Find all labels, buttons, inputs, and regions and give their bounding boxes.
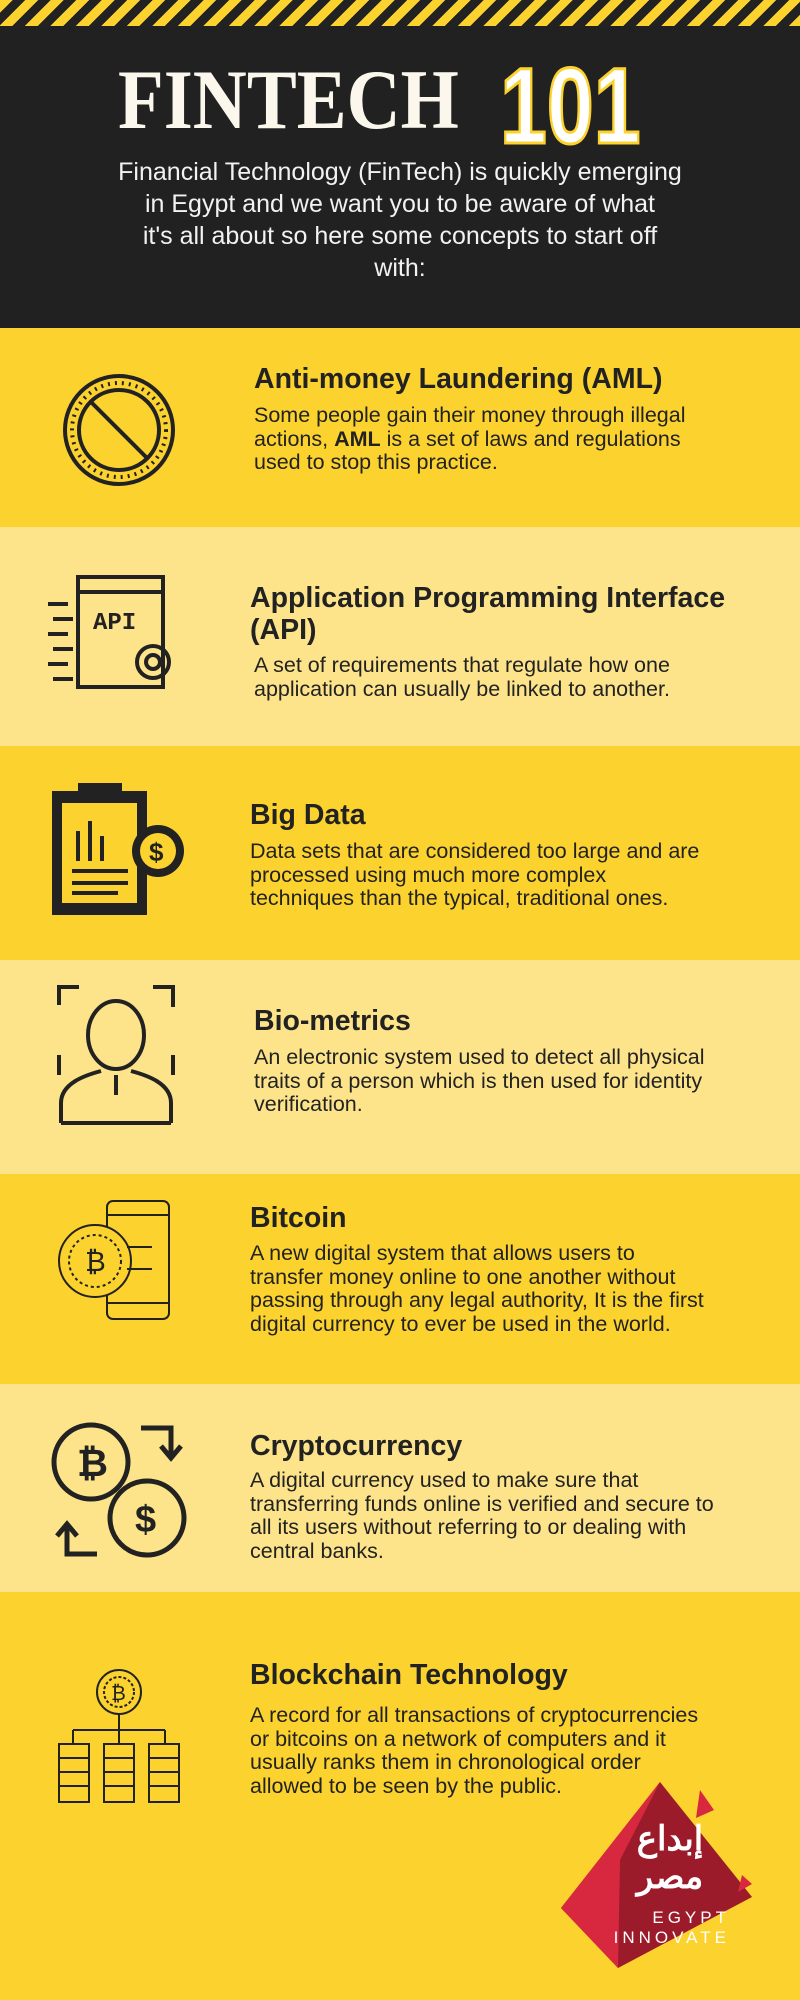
icon: API xyxy=(48,575,171,689)
panel: Big Data: Data sets that are considered too large and are xyxy=(250,839,699,863)
icon: phone with bitcoin: ₿ xyxy=(85,1246,106,1277)
subtitle: it's all about so here some concepts to start off xyxy=(143,222,657,250)
icon: prohibited xyxy=(63,374,175,486)
panel: API: Application Programming Interface xyxy=(250,582,725,614)
panel: AML: actions, AML is a set of laws and regulations xyxy=(254,427,681,451)
panel: Bitcoin: transfer money online to one another without xyxy=(250,1265,676,1289)
panel: Bitcoin xyxy=(58,1200,704,1336)
panel: Cryptocurrency: central banks. xyxy=(250,1539,384,1563)
panel: Big Data: techniques than the typical, traditional ones. xyxy=(250,886,668,910)
panel: API: application can usually be linked to another. xyxy=(254,677,670,701)
icon: big data clipboard: $ xyxy=(149,837,164,867)
header panel xyxy=(0,26,800,328)
title: FINTECH xyxy=(118,53,459,147)
panel: Blockchain: Blockchain Technology xyxy=(250,1659,568,1691)
panel: Bitcoin: digital currency to ever be used in the world. xyxy=(250,1312,671,1336)
panel: Blockchain: usually ranks them in chronological order xyxy=(250,1750,641,1774)
panel: Blockchain: or bitcoins on a network of computers and it xyxy=(250,1727,666,1751)
section backgrounds xyxy=(0,328,800,527)
panel: Big Data: processed using much more complex xyxy=(250,863,606,887)
panel: AML: used to stop this practice. xyxy=(254,450,498,474)
panel: Bio-metrics: verification. xyxy=(254,1092,363,1116)
panel: Bio-metrics: An electronic system used to detect all physical xyxy=(254,1045,705,1069)
panel: AML xyxy=(63,363,685,486)
panel: Cryptocurrency: A digital currency used to make sure that xyxy=(250,1468,638,1492)
title: 101 xyxy=(500,45,641,166)
icon: coins exchange: ₿ xyxy=(77,1443,108,1485)
panel: API: A set of requirements that regulate how one xyxy=(254,653,670,677)
panel: API: (API) xyxy=(250,614,316,646)
panel: Blockchain: allowed to be seen by the public. xyxy=(250,1774,562,1798)
panel: AML: Some people gain their money through illegal xyxy=(254,403,685,427)
panel: Cryptocurrency xyxy=(52,1422,714,1563)
panel: Cryptocurrency: all its users without referring to or dealing with xyxy=(250,1515,686,1539)
panel: Cryptocurrency: Cryptocurrency xyxy=(250,1430,462,1462)
subtitle: with: xyxy=(374,254,426,282)
subtitle: Financial Technology (FinTech) is quickly emerging xyxy=(118,158,682,186)
hazard stripe bar xyxy=(0,0,800,26)
panel: Blockchain: A record for all transactions of cryptocurrencies xyxy=(250,1703,698,1727)
logo: Egypt Innovate: INNOVATE xyxy=(614,1928,730,1947)
subtitle: in Egypt and we want you to be aware of what xyxy=(145,190,655,218)
subtitle xyxy=(118,158,682,282)
icon: API: API xyxy=(93,610,136,637)
icon: blockchain servers: ₿ xyxy=(111,1683,126,1705)
panel: Bitcoin: A new digital system that allows users to xyxy=(250,1241,635,1265)
logo: Egypt Innovate xyxy=(561,1782,752,1968)
logo: Egypt Innovate: مصر xyxy=(637,1858,703,1896)
panel: Bio-metrics: traits of a person which is then used for identity xyxy=(254,1069,702,1093)
icon: phone with bitcoin xyxy=(58,1200,170,1320)
logo: Egypt Innovate: إبداع xyxy=(637,1820,703,1858)
panel: Big Data: Big Data xyxy=(250,799,366,831)
icon: coins exchange: $ xyxy=(135,1499,156,1541)
panel: AML: Anti-money Laundering (AML) xyxy=(254,363,662,395)
icon: coins exchange xyxy=(52,1422,186,1558)
panel: Bitcoin: Bitcoin xyxy=(250,1202,347,1234)
icon: big data clipboard xyxy=(52,783,184,915)
panel: Cryptocurrency: transferring funds online is verified and secure to xyxy=(250,1492,714,1516)
icon: face scan xyxy=(57,985,175,1125)
panel: Big Data xyxy=(52,783,699,915)
icon: blockchain servers xyxy=(58,1669,180,1803)
panel: API xyxy=(48,575,725,701)
panel: Bitcoin: passing through any legal authority, It is the first xyxy=(250,1288,704,1312)
panel: Blockchain xyxy=(58,1659,698,1803)
logo: Egypt Innovate: EGYPT xyxy=(652,1908,730,1927)
panel: Bio-metrics xyxy=(57,985,705,1125)
panel: Bio-metrics: Bio-metrics xyxy=(254,1005,411,1037)
title xyxy=(118,45,641,166)
